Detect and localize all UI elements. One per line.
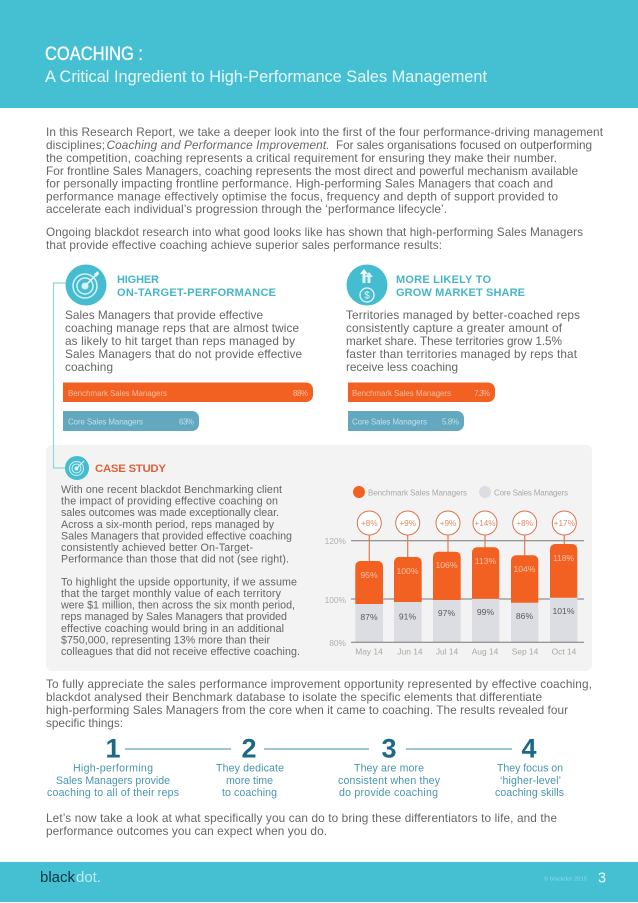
intro text block: For frontline Sales Managers, coaching represents the most direct and powerful mechanism available [46, 164, 578, 178]
bar: benchmark 7.3%: Benchmark Sales Managers [352, 389, 451, 398]
month labels: Sep 14 [512, 646, 539, 656]
benchmark values [360, 553, 575, 580]
lead-in paragraph: To fully appreciate the sales performance improvement opportunity represented by effective coaching, [46, 677, 592, 691]
intro text block: for personally impacting frontline performance. High-performing Sales Managers that coach and [46, 176, 553, 190]
core bars [355, 598, 577, 642]
chart legend: Benchmark Sales Managers [368, 488, 467, 498]
case study text: reps managed by Sales Managers that provided [61, 611, 287, 623]
bar: core 63%: 63% [179, 418, 194, 426]
bar: benchmark 88%: 88% [293, 389, 308, 398]
header band [0, 0, 638, 108]
bar: benchmark 88% [63, 382, 313, 402]
bar: benchmark 7.3% [348, 382, 495, 402]
panel: higher on-target performance: ON-TARGET-PERFORMANCE [117, 287, 276, 299]
uplift callouts: +14% [474, 519, 496, 528]
step 2 [216, 734, 284, 799]
bar: core 63%: Core Sales Managers [68, 418, 143, 426]
intro text block: the competition, coaching represents a critical requirement for ensuring they make their number. [46, 151, 557, 165]
chart legend: Core Sales Managers [494, 488, 568, 498]
callout stems [369, 535, 564, 561]
benchmark values: 106% [436, 560, 458, 570]
step 3 [338, 734, 441, 799]
intro text block: performance manage effectively optimise the focus, frequency and depth of support provided to [46, 190, 558, 204]
bar: core 5.8%: Core Sales Managers [352, 418, 427, 426]
lead-in paragraph [46, 677, 592, 730]
case study text: effective coaching would bring in an additional [61, 623, 284, 635]
step 2: more time [226, 775, 273, 787]
step 1: High-performing [73, 762, 153, 774]
icon: growth arrows and dollar: $ [364, 290, 370, 302]
step 4: ‘higher-level’ [500, 775, 561, 787]
month labels [355, 646, 577, 656]
panel: more likely to grow market share: GROW MARKET SHARE [396, 287, 525, 299]
uplift callouts: +17% [554, 519, 575, 528]
y axis labels: 80% [329, 638, 347, 648]
logo [40, 870, 101, 886]
month labels: Jun 14 [397, 646, 423, 656]
uplift callouts: +8% [361, 519, 378, 528]
case study text: $750,000, representing 13% more than their [61, 634, 270, 646]
closing paragraph: performance outcomes you can expect when you do. [46, 824, 327, 838]
benchmark bars [355, 544, 577, 604]
step 4: 4 [521, 734, 537, 764]
case study heading [65, 456, 166, 480]
case study text: Across a six-month period, reps managed by [61, 519, 275, 531]
step 3: do provide coaching [339, 787, 438, 799]
panel: higher on-target performance [63, 264, 313, 431]
month labels: May 14 [355, 646, 383, 656]
step 1: 1 [105, 734, 121, 764]
panel: higher on-target performance: as likely to hit target than reps managed by [65, 334, 295, 348]
y axis labels: 120% [325, 536, 347, 546]
case study text: that the target monthly value of each territory [61, 588, 282, 600]
benchmark values: 118% [553, 553, 575, 563]
lead-in paragraph: high-performing Sales Managers from the core when it came to coaching. The results revealed four [46, 703, 568, 717]
intro text block: accelerate each individual’s progression through the ‘performance lifecycle’. [46, 202, 447, 216]
step 1: coaching to all of their reps [47, 787, 179, 799]
bar: core 63% [63, 411, 199, 431]
step 4 [495, 734, 564, 799]
case study text: With one recent blackdot Benchmarking client [61, 484, 282, 496]
benchmark values: 104% [514, 564, 536, 574]
core values: 91% [399, 612, 416, 622]
intro text block: Coaching and Performance Improvement. [106, 138, 330, 152]
intro text block: Ongoing blackdot research into what good looks like has shown that high-performing Sales Managers [46, 225, 583, 239]
y axis labels: 100% [325, 595, 347, 605]
benchmark values: 113% [475, 556, 497, 566]
panel: more likely to grow market share: market share. These territories grow 1.5% [346, 334, 562, 348]
uplift callouts: +8% [516, 519, 533, 528]
case study text: sales outcomes was made exceptionally clear. [61, 507, 279, 519]
step 4: coaching skills [495, 787, 564, 799]
lead-in paragraph: specific things: [46, 716, 123, 730]
core values [360, 606, 575, 622]
subtitle: A Critical Ingredient to High-Performance Sales Management [45, 68, 487, 86]
panel: higher on-target performance: coaching [65, 360, 113, 374]
intro text block: that provide effective coaching achieve superior sales performance results: [46, 238, 442, 252]
bar: benchmark 7.3%: 7.3% [474, 389, 490, 398]
panel: more likely to grow market share: receive less coaching [346, 360, 458, 374]
footer band [0, 862, 638, 902]
step 2: They dedicate [216, 762, 284, 774]
bar: benchmark 88%: Benchmark Sales Managers [68, 389, 167, 398]
panel: more likely to grow market share: consistently capture a greater amount of [346, 321, 563, 335]
copyright: © blackdot 2015 [544, 876, 587, 882]
benchmark values: 100% [397, 566, 419, 576]
title: COACHING : [45, 44, 143, 65]
step 2: 2 [241, 734, 257, 764]
panel: more likely to grow market share: faster than territories managed by reps that [346, 347, 578, 361]
heading: MORE LIKELY TO [396, 274, 491, 286]
intro text block [46, 125, 604, 252]
case study text: consistently achieved better On-Target- [61, 542, 253, 554]
case study panel background [46, 445, 592, 671]
closing paragraph [46, 811, 557, 838]
case study heading: CASE STUDY [95, 463, 166, 475]
step 1 [47, 734, 179, 799]
step 1: Sales Managers provide [56, 775, 170, 787]
bar: core 5.8% [348, 411, 464, 431]
case study text: To highlight the upside opportunity, if we assume [61, 576, 297, 588]
description: Territories managed by better-coached reps [346, 308, 580, 322]
step 2: to coaching [222, 787, 277, 799]
benchmark values: 95% [360, 570, 378, 580]
icon: small target [65, 456, 89, 480]
logo: dot. [76, 870, 101, 886]
case study text [60, 484, 300, 658]
uplift callouts: +9% [440, 519, 456, 528]
core values: 99% [477, 607, 494, 617]
chart legend [353, 486, 568, 498]
panel: more likely to grow market share [346, 264, 580, 431]
case study text: the impact of providing effective coaching on [61, 496, 278, 508]
four step timeline [47, 734, 564, 799]
connector line [54, 283, 66, 468]
core values: 101% [553, 606, 575, 616]
month labels: Jul 14 [436, 646, 459, 656]
core values: 86% [516, 611, 533, 621]
uplift callouts [357, 511, 576, 535]
step 3: consistent when they [338, 775, 441, 787]
step 4: They focus on [497, 762, 563, 774]
icon: growth arrows and dollar [346, 264, 388, 306]
case study text: colleagues that did not receive effective coaching. [61, 646, 300, 658]
closing paragraph: Let’s now take a look at what specifically you can do to bring these differentiators to life, and the [46, 811, 557, 825]
description: Sales Managers that provide effective [65, 308, 263, 322]
core values: 87% [360, 612, 378, 622]
lead-in paragraph: blackdot analysed their Benchmark database to isolate the specific elements that differentiate [46, 690, 542, 704]
page number: 3 [598, 870, 606, 886]
month labels: Oct 14 [552, 646, 577, 656]
month labels: Aug 14 [472, 646, 499, 656]
logo: black [40, 870, 76, 886]
uplift callouts: +9% [399, 519, 416, 528]
case study text: Sales Managers that provided effective coaching [61, 530, 292, 542]
panel: higher on-target performance: Sales Managers that do not provide effective [65, 347, 302, 361]
step 3: 3 [381, 734, 397, 764]
intro text block: In this Research Report, we take a deeper look into the first of the four performance-driving management [46, 125, 604, 139]
intro text block: For sales organisations focused on outperforming [336, 138, 592, 152]
step 3: They are more [354, 762, 424, 774]
panel: higher on-target performance: coaching manage reps that are almost twice [65, 321, 299, 335]
case study text: Performance than those that did not (see right). [61, 554, 289, 566]
heading: HIGHER [117, 274, 159, 286]
core values: 97% [438, 608, 455, 618]
bar: core 5.8%: 5.8% [442, 418, 459, 426]
case study text: were $1 million, then across the six month period, [60, 600, 295, 612]
bar chart: monthly performance [325, 486, 584, 656]
intro text block: disciplines; [46, 138, 105, 152]
y axis labels [325, 536, 347, 648]
icon: target [66, 264, 106, 306]
